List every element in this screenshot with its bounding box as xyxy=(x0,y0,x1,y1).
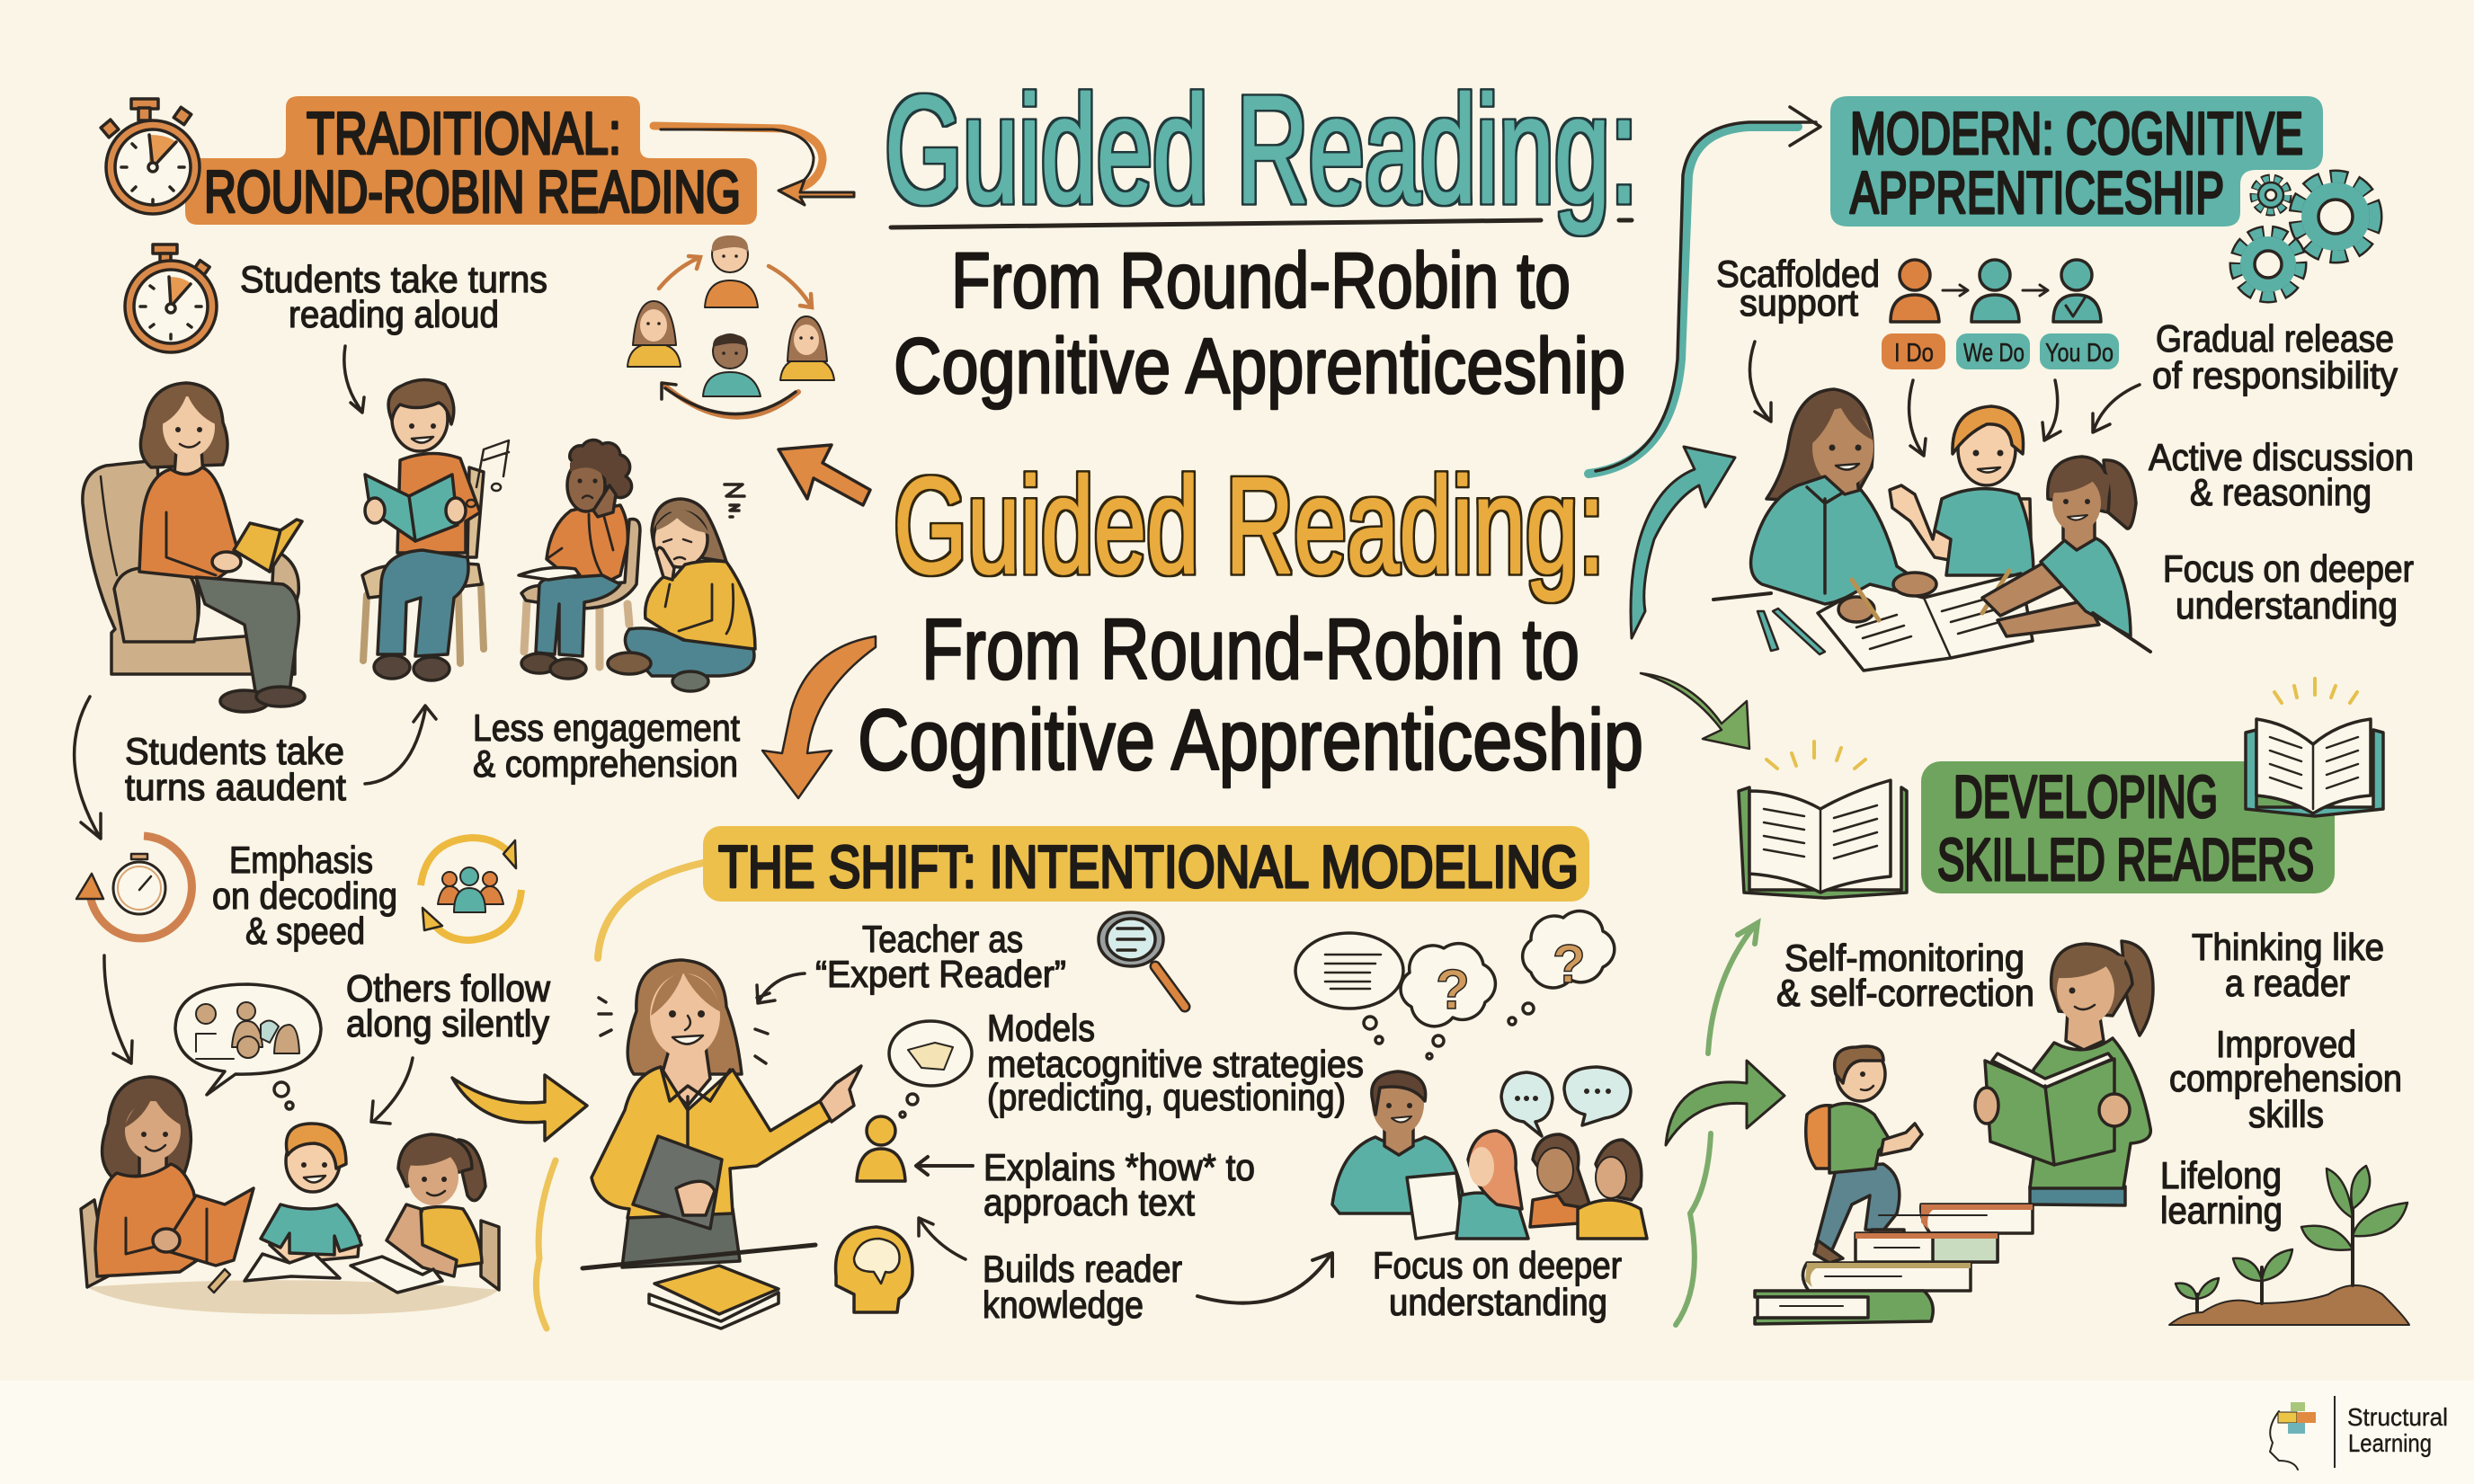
text: gradual release: of responsibility xyxy=(2152,354,2398,396)
arrow: down to students xyxy=(371,1058,413,1124)
logo: structural learning: Structural xyxy=(2347,1403,2448,1431)
text: students take turns reading aloud: reading aloud xyxy=(289,293,499,335)
text: active discussion xyxy=(2149,436,2414,513)
arrows: thin callouts xyxy=(1749,342,2140,456)
text: others follow along silently: along silently xyxy=(346,1002,549,1044)
second title block xyxy=(858,449,1643,788)
panel: developing skilled readers xyxy=(1641,673,2409,1325)
text: emphasis on decoding and speed: Emphasis xyxy=(229,839,373,881)
text: focus on deeper understanding: understanding xyxy=(1389,1281,1607,1323)
heading: traditional: TRADITIONAL: xyxy=(307,100,621,166)
illustration: teacher with students xyxy=(1713,389,2150,671)
text: emphasis on decoding and speed xyxy=(212,839,397,952)
text: others follow along silently xyxy=(346,967,551,1044)
text: self-monitoring: & self-correction xyxy=(1776,972,2034,1014)
icon: growing plants xyxy=(2169,1166,2409,1325)
diagram: i do we do you do xyxy=(1882,260,2119,369)
icon: thought bubble with book xyxy=(889,1021,972,1117)
arrow: to small group xyxy=(104,955,132,1063)
text: focus deeper understanding: understanding xyxy=(2176,584,2398,626)
illustration: discussion group xyxy=(1332,1067,1647,1239)
icon: stopwatch xyxy=(125,244,217,352)
diagram: i do we do you do: You Do xyxy=(2045,339,2114,368)
icon: thought bubbles: ? xyxy=(1553,934,1586,994)
panel: traditional round-robin: ROUND-ROBIN READING xyxy=(204,158,741,225)
text: builds reader knowledge: knowledge xyxy=(983,1284,1144,1326)
text: explains how: Explains *how* to xyxy=(983,1146,1255,1188)
second title block: Guided Reading: xyxy=(894,449,1605,602)
text: lifelong learning xyxy=(2160,1154,2283,1231)
title subtitle: From Round-Robin to xyxy=(951,237,1571,324)
heading text: THE SHIFT: INTENTIONAL MODELING xyxy=(718,833,1579,900)
text: students take turns aaudent: turns aaudent xyxy=(125,766,346,808)
icon: sleep z xyxy=(725,484,744,517)
arrow: yellow block xyxy=(452,1075,587,1141)
arrow: to deeper understanding xyxy=(1197,1253,1332,1303)
logo: structural learning xyxy=(2270,1396,2448,1470)
books: yellow stack xyxy=(649,1266,779,1328)
table line xyxy=(583,1245,815,1268)
text: others follow along silently: Others follow xyxy=(346,967,551,1009)
text: improved comprehension: comprehension xyxy=(2169,1057,2402,1099)
arrow: to teacher xyxy=(757,973,805,1003)
icon: stopwatch with loop xyxy=(76,836,191,938)
text: models metacognitive strategies: Models xyxy=(987,1007,1095,1049)
text: explains how xyxy=(983,1146,1255,1223)
text: scaffolded support xyxy=(1716,253,1880,324)
illustration: bored student xyxy=(519,440,640,679)
arrow: to reader xyxy=(344,346,364,413)
diagram: i do we do you do: I Do xyxy=(1894,339,1934,368)
illustration: boy reading aloud xyxy=(362,379,509,680)
text: self-monitoring xyxy=(1776,937,2034,1014)
arrow: teal block xyxy=(1631,447,1735,638)
text: builds reader knowledge xyxy=(983,1248,1182,1326)
arrow: green block xyxy=(1666,1061,1784,1145)
main title block: Cognitive Apprenticeship xyxy=(894,323,1625,410)
text: students take turns reading aloud xyxy=(240,258,547,335)
icon: stopwatch header xyxy=(101,99,200,214)
text: active discussion: & reasoning xyxy=(2190,471,2372,513)
text: thinking like a reader: a reader xyxy=(2225,962,2350,1004)
arrow: down to students xyxy=(75,697,101,839)
text: less engagement xyxy=(473,706,740,785)
heading text: SKILLED READERS xyxy=(1937,826,2314,893)
text: improved comprehension xyxy=(2169,1023,2402,1135)
illustration: girl with book xyxy=(1975,941,2153,1205)
text: gradual release xyxy=(2152,317,2398,396)
second title block: Cognitive Apprenticeship xyxy=(858,692,1643,788)
text: thinking like a reader xyxy=(2192,926,2384,1004)
text: thinking like a reader: Thinking like xyxy=(2192,926,2384,968)
text: teacher as expert reader: “Expert Reader” xyxy=(815,953,1066,995)
arrow: teal to modern xyxy=(1589,107,1820,474)
text: less engagement: Less engagement xyxy=(473,706,740,749)
text: lifelong learning: Lifelong xyxy=(2160,1154,2282,1196)
text: gradual release: Gradual release xyxy=(2156,317,2394,360)
icon: open book green xyxy=(1739,742,1907,898)
text: self-monitoring: Self-monitoring xyxy=(1784,937,2025,979)
icon: magnifying glass xyxy=(1099,912,1185,1007)
icon: gears xyxy=(2236,177,2375,297)
logo: structural learning: Learning xyxy=(2348,1429,2432,1457)
icon: round-robin cycle xyxy=(627,235,834,417)
panel: the shift xyxy=(452,826,1647,1328)
panel: modern cognitive apprenticeship xyxy=(1589,96,2414,671)
main title block xyxy=(885,65,1638,410)
arrow: title to cycle xyxy=(779,445,870,505)
books: stairs xyxy=(1921,1204,2033,1233)
text: lifelong learning: learning xyxy=(2160,1189,2283,1231)
heading pill xyxy=(703,826,1589,902)
arrow: title to traditional xyxy=(654,126,854,205)
arrow: thin green up xyxy=(1708,923,1758,1053)
arrow: explains xyxy=(916,1157,973,1175)
heading text: DEVELOPING xyxy=(1953,763,2218,830)
text: builds reader knowledge: Builds reader xyxy=(983,1248,1182,1290)
book xyxy=(1818,573,2033,671)
heading text xyxy=(1937,763,2314,893)
diagram: i do we do you do: We Do xyxy=(1963,339,2025,368)
illustration: boy climbing book stairs xyxy=(1755,1046,2033,1324)
heading: modern: MODERN: COGNITIVE xyxy=(1850,100,2303,166)
text: models metacognitive strategies: metacognitive strategies xyxy=(987,1043,1364,1085)
text: focus on deeper understanding: Focus on deeper xyxy=(1373,1244,1622,1286)
text: emphasis on decoding and speed: on decoding xyxy=(212,875,397,917)
icon: thought bubbles: ? xyxy=(1436,959,1470,1021)
text: teacher as expert reader xyxy=(815,918,1066,995)
text: less engagement: & comprehension xyxy=(473,742,738,785)
text: students take turns aaudent: Students take xyxy=(125,730,344,772)
illustration: small group at table xyxy=(81,1077,499,1314)
text: improved comprehension: skills xyxy=(2248,1093,2324,1135)
text: focus deeper understanding: Focus on deeper xyxy=(2163,547,2414,590)
text: focus deeper understanding xyxy=(2163,547,2414,626)
panel: traditional round-robin xyxy=(75,96,876,1314)
arrow: thin green wavy xyxy=(1676,1133,1711,1325)
footer band xyxy=(0,1381,2474,1484)
text: improved comprehension: Improved xyxy=(2216,1023,2356,1065)
connector: yellow wavy line xyxy=(536,1160,556,1328)
main title block: Guided Reading: xyxy=(885,65,1638,235)
text: active discussion: Active discussion xyxy=(2149,436,2414,478)
arrow: builds xyxy=(919,1218,966,1259)
text: scaffolded support: support xyxy=(1740,281,1858,324)
illustration: teacher in armchair xyxy=(83,383,305,712)
text: students take turns aaudent xyxy=(125,730,346,808)
text: emphasis on decoding and speed: & speed xyxy=(245,910,365,952)
text: scaffolded support: Scaffolded xyxy=(1716,253,1880,295)
heading pill xyxy=(1921,761,2335,893)
illustration: expert teacher xyxy=(592,960,861,1267)
icon: speech bubble group xyxy=(175,984,321,1109)
icon: person yellow xyxy=(857,1116,905,1181)
text: students take turns reading aloud: Students take turns xyxy=(240,258,547,300)
icon: thought bubbles xyxy=(1295,911,1615,1059)
icon: brain head xyxy=(836,1227,912,1312)
icon: group cycle xyxy=(421,838,521,940)
arrow: back to reader xyxy=(365,706,436,784)
panel: modern cognitive apprenticeship: APPRENTICESHIP xyxy=(1850,159,2224,226)
text: models metacognitive strategies xyxy=(987,1007,1364,1118)
connector: yellow curve xyxy=(598,863,703,958)
second subtitle: From Round-Robin to xyxy=(921,601,1580,698)
text: teacher as expert reader: Teacher as xyxy=(862,918,1023,960)
icon: music notes xyxy=(467,440,509,507)
text: focus on deeper understanding xyxy=(1373,1244,1622,1323)
illustration: sleepy student xyxy=(608,484,755,691)
text: models metacognitive strategies: (predicting, questioning) xyxy=(987,1076,1346,1118)
arrow: large orange down xyxy=(762,636,876,798)
icon: open book teal xyxy=(2246,679,2383,816)
text: explains how: approach text xyxy=(983,1181,1195,1223)
